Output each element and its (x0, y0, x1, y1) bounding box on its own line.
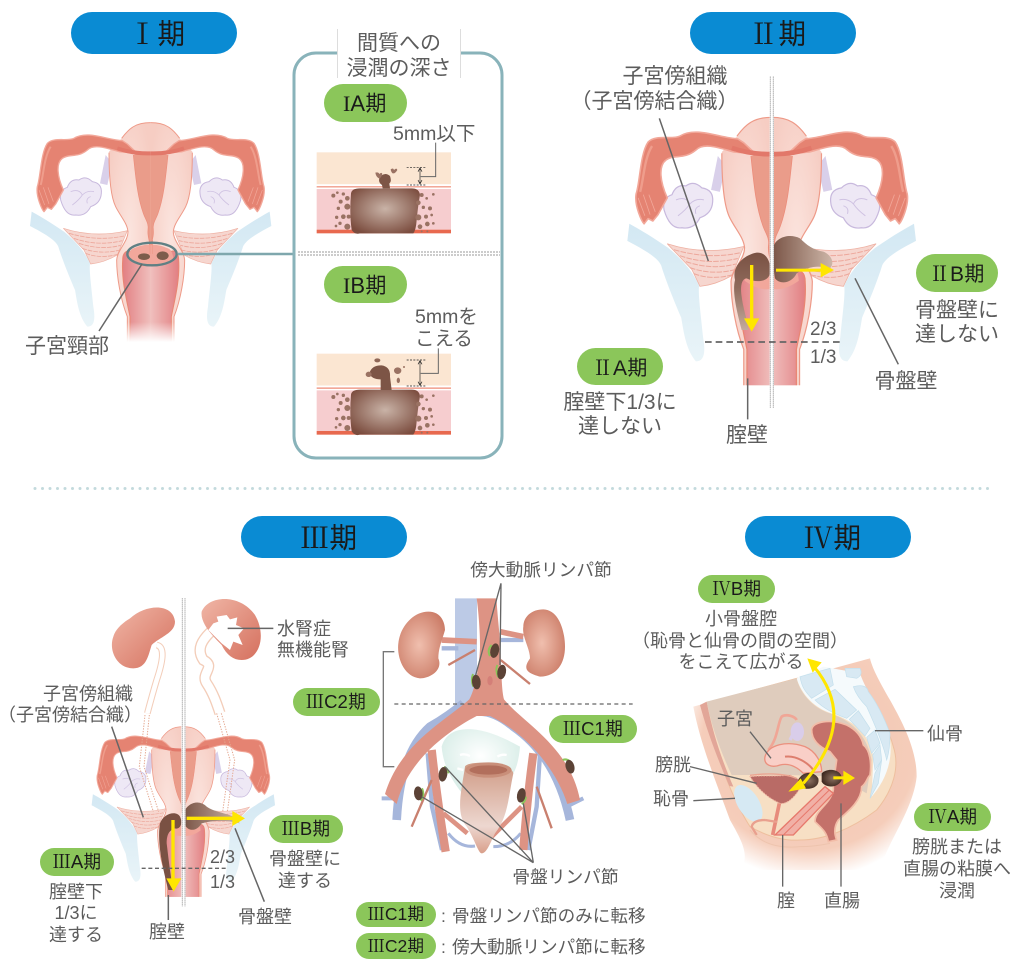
heading: stage I (71, 12, 237, 54)
badge: IVA: ⅣA期 (928, 803, 978, 829)
badge: IIIC2: ⅢC2期 (306, 688, 366, 714)
ureter: right, dilated (200, 627, 220, 713)
badge: IIA: ⅡA期 (592, 352, 648, 382)
arrow: right (187, 811, 245, 826)
legend: IIIC2: ⅢC2期 (367, 933, 425, 958)
text: IVB: をこえて広がる (678, 652, 804, 672)
badge: IA: IA期 (343, 91, 387, 116)
badge: IIIC1: ⅢC1期 (563, 715, 623, 741)
text: IVA: 膀胱または (912, 837, 1002, 857)
labels: stage IV: 腟 (777, 891, 795, 911)
veins (382, 598, 583, 850)
labels: stage III: 1/3 (210, 872, 235, 892)
tumour: parametrial extension (773, 236, 832, 282)
legend: IIIC1: : (441, 906, 446, 926)
badge: IVB: ⅣB期 (712, 575, 762, 601)
badge: IIIC1 (549, 715, 637, 743)
badge: IIIB (269, 815, 343, 843)
text: IVA (903, 837, 1011, 901)
labels: stage II: 子宮傍組織 (622, 65, 728, 88)
arteries (385, 598, 580, 852)
label: over 5mm (415, 306, 478, 350)
text: IIIA: 達する (49, 925, 103, 945)
text: IIIA: 腟壁下 (49, 882, 103, 902)
text: IIA: 達しない (578, 415, 662, 438)
text: IVB (632, 609, 848, 672)
rectum (460, 762, 513, 853)
badge: IVA (914, 803, 991, 831)
midline (181, 598, 186, 907)
arrow: down (744, 265, 759, 332)
diagram: stage III kidneys and uterus (92, 598, 275, 920)
legend: IIIC2 (356, 933, 646, 959)
rectum (812, 721, 871, 842)
text: IIIB (269, 849, 341, 891)
badge: IB: IB期 (343, 273, 387, 298)
legend: IIIC1: 骨盤リンパ節のみに転移 (452, 906, 646, 926)
labels: stage IV: 直腸 (824, 891, 860, 911)
lymph nodes (413, 643, 576, 804)
dashed level line (705, 339, 840, 344)
labels: stage II (570, 65, 938, 447)
level line and bracket (383, 652, 633, 767)
labels: stage II: 骨盤壁 (874, 370, 938, 393)
divider (35, 487, 993, 490)
labels: lymph nodes (470, 560, 619, 887)
legend: IIIC1 (356, 901, 646, 927)
tumour: vaginal extension (734, 253, 770, 330)
labels: stage II: 1/3 (810, 347, 836, 368)
badge: IA (324, 84, 407, 122)
text: IVA: 直腸の粘膜へ (903, 859, 1011, 879)
labels: lymph nodes: 傍大動脈リンパ節 (470, 560, 612, 580)
uterus (765, 715, 822, 773)
heading: stage IV: Ⅳ期 (804, 516, 862, 557)
badge: IB (324, 266, 407, 303)
labels: stage IV: 仙骨 (927, 724, 963, 744)
text: IVB: （恥骨と仙骨の間の空間） (632, 631, 848, 651)
text: IIIB: 骨盤壁に (269, 849, 341, 869)
heading: stage I: Ⅰ期 (128, 12, 186, 53)
label: over 5mm: 5mmを (415, 306, 478, 328)
labels: stage IV: 恥骨 (653, 789, 689, 809)
ureter dotted segments (139, 713, 235, 812)
sacrum (797, 667, 891, 798)
badge: IIIA (40, 848, 114, 876)
badge: IIIA: ⅢA期 (52, 848, 102, 874)
labels: stage III (0, 619, 349, 942)
labels: stage III: 無機能腎 (277, 640, 349, 660)
leaders (112, 628, 273, 920)
diagram: lymph nodes (382, 583, 583, 863)
text: IIB (915, 299, 999, 346)
text: IIA: 腟壁下1/3に (563, 391, 677, 414)
text: IVB: 小骨盤腔 (705, 609, 777, 629)
label: 5mm or less: 5mm以下 (393, 123, 475, 145)
labels: stage III: （子宮傍結合織） (0, 705, 142, 725)
label: over 5mm: こえる (415, 328, 473, 350)
ureter: left (147, 645, 162, 713)
badge: IIIB: ⅢB期 (281, 815, 331, 841)
text: IIA (563, 391, 677, 438)
dashed level line (142, 866, 228, 870)
text: IIIA (49, 882, 103, 945)
uterus diagram: stage I (25, 123, 294, 362)
labels: stage II: 腟壁 (726, 424, 768, 447)
legend: IIIC2: : (441, 937, 446, 957)
labels: stage II: （子宮傍結合織） (570, 90, 738, 113)
text: IIIB: 達する (278, 871, 332, 891)
heading: stage III: Ⅲ期 (300, 516, 358, 557)
badge: IVB (698, 575, 775, 603)
midline (770, 77, 774, 408)
leader: cervix (99, 264, 142, 331)
labels: stage IV: 膀胱 (655, 755, 691, 775)
vagina (775, 787, 833, 835)
labels: stage II: 2/3 (810, 319, 836, 340)
leaders (659, 118, 898, 419)
urethra (773, 803, 779, 835)
leaders (690, 731, 923, 887)
text: IIB: 達しない (915, 323, 999, 346)
panel title (338, 29, 460, 80)
pubic bone (728, 780, 768, 827)
labels: lymph nodes: 骨盤リンパ節 (512, 867, 619, 887)
histology: IB (317, 348, 451, 435)
badge: IIB (916, 254, 998, 292)
arrow: down (166, 820, 181, 892)
text: IVA: 浸潤 (939, 881, 975, 901)
label: cervix: 子宮頸部 (25, 335, 109, 358)
panel: depth of stromal invasion (294, 29, 502, 458)
labels: stage III: 骨盤壁 (238, 907, 292, 927)
heading: stage III (241, 516, 407, 558)
legend: IIIC1: ⅢC1期 (367, 901, 425, 926)
legend: IIIC2: 傍大動脈リンパ節に転移 (452, 937, 646, 957)
labels: stage III: 水腎症 (277, 619, 331, 639)
body (693, 658, 917, 870)
kidneys (398, 609, 565, 678)
connector to depth panel (178, 253, 294, 255)
heading: stage II: Ⅱ期 (749, 12, 807, 53)
kidney: left (112, 607, 175, 668)
uterus diagram: stage II (627, 77, 916, 419)
heading: stage II (690, 12, 856, 54)
histology: IA (317, 143, 451, 234)
text: IIIA: 1/3に (54, 903, 98, 923)
badge: IIB: ⅡB期 (929, 258, 985, 288)
tumour (798, 770, 842, 789)
tumour: right (185, 803, 240, 830)
kidney: right, hydronephrosis (202, 599, 261, 660)
panel title: 間質への (357, 32, 441, 55)
labels: stage IV (653, 709, 963, 911)
bladder (750, 774, 803, 804)
badge: IIA (577, 348, 663, 385)
panel title: 浸潤の深さ (346, 57, 452, 80)
diagram: sagittal pelvis (690, 658, 923, 887)
pelvic bone (442, 729, 520, 797)
labels: stage III: 2/3 (210, 847, 235, 867)
leaders (422, 583, 533, 863)
arrow: to rectum (833, 771, 855, 785)
arrow: right (776, 263, 834, 277)
labels: stage III: 腟壁 (149, 922, 185, 942)
heading: stage IV (745, 516, 911, 558)
text: IIB: 骨盤壁に (915, 299, 999, 322)
labels: stage III: 子宮傍組織 (43, 684, 133, 704)
tumour: left (159, 813, 181, 890)
labels: stage IV: 子宮 (717, 709, 753, 729)
arrow: upward curve (788, 658, 834, 792)
badge: IIIC2 (293, 688, 380, 716)
